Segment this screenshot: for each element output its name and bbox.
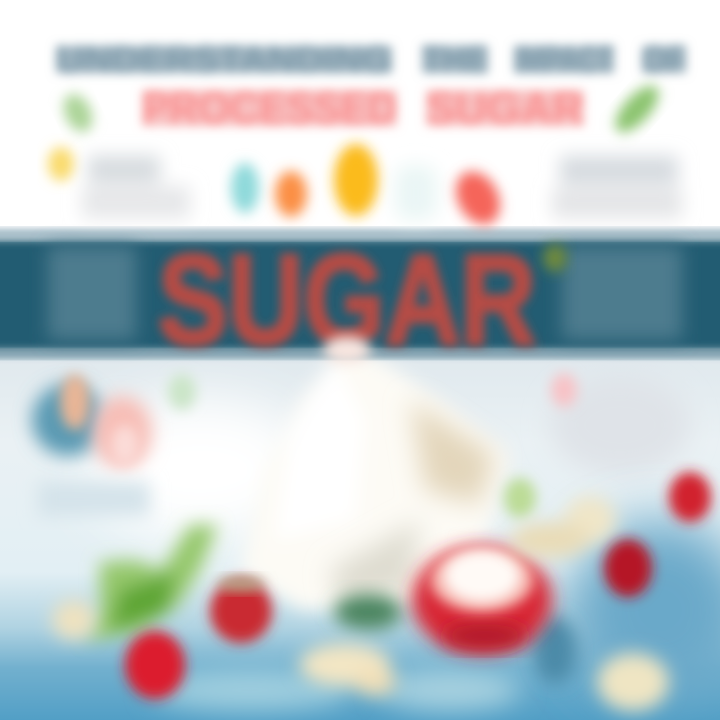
- berry top right: [669, 472, 711, 522]
- red bowl of sugar: [412, 546, 552, 654]
- title band: [0, 229, 720, 358]
- sugar pile: [240, 345, 510, 610]
- icon: orange fruit: [275, 171, 307, 217]
- text block: upper right: [552, 156, 682, 218]
- text block: upper left: [82, 156, 190, 218]
- nut bottom right: [597, 653, 669, 711]
- heading line 2: PROCESSED: [142, 82, 397, 134]
- berry centre left: [210, 579, 272, 643]
- pile tip over band: [323, 336, 371, 364]
- heading line 1: THE: [422, 38, 488, 82]
- icon: yellow fruit: [334, 144, 378, 216]
- nut left: [52, 600, 96, 640]
- nut cluster centre: [299, 643, 397, 696]
- pile shading: [330, 400, 495, 605]
- icon: yellow dot: [48, 147, 74, 181]
- band side panel: right text: [562, 246, 682, 340]
- icon: left leaf: [58, 89, 98, 137]
- icon: small green leaf on band: [543, 244, 567, 272]
- basil leaves left: [85, 525, 218, 640]
- berry middle right: [604, 539, 652, 597]
- dark leaf under pile: [334, 594, 402, 630]
- icon: pale glass: [395, 165, 437, 220]
- icon: right leaf: [608, 79, 666, 139]
- icon: teal fruit: [231, 163, 259, 213]
- heading line 1: IMPACT: [514, 38, 614, 82]
- icon: pale green top leaf: [168, 374, 196, 410]
- heading line 1: UNDERSTANDING: [56, 38, 392, 82]
- right leaf and nuts: [504, 478, 536, 518]
- heading line 2: [142, 82, 584, 134]
- icon: red fruit: [447, 164, 509, 232]
- heading line 1: OF: [642, 38, 686, 82]
- lower left infographic circle: [32, 374, 152, 468]
- icon: pink top marker: [551, 373, 577, 407]
- main word: SUGAR: SUGAR: [158, 229, 536, 372]
- lower photo background: [0, 350, 720, 720]
- berry bottom left: [125, 631, 185, 699]
- heading line 2: SUGAR: [426, 82, 584, 134]
- heading line 1: [56, 38, 686, 82]
- text block: lower left: [38, 482, 150, 516]
- band side panel: left text: [48, 246, 136, 340]
